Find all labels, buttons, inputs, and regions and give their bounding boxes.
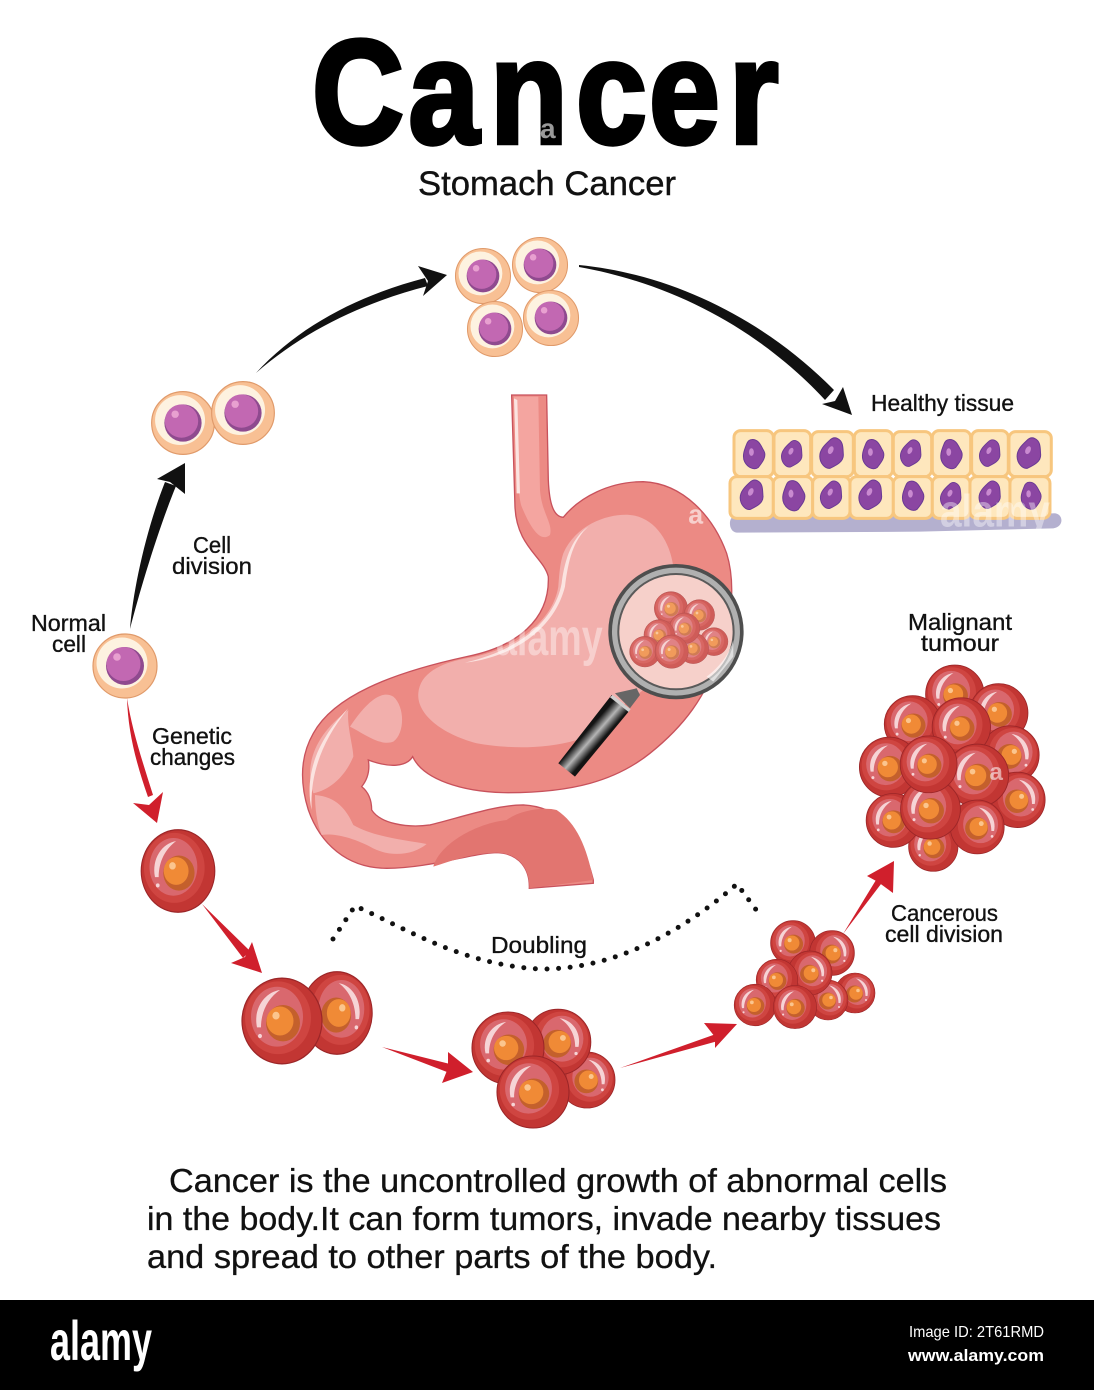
label: malignant tumour (908, 609, 1013, 656)
arrow: cluster to malignant tumour (843, 861, 894, 934)
cells: malignant tumour: a (989, 759, 1003, 786)
magnifying glass handle (558, 688, 640, 777)
cell: mutated cell (141, 830, 215, 912)
label: cell division: division (172, 553, 252, 579)
cells: four cancer cells (472, 1009, 615, 1128)
cells: four healthy cells (455, 237, 579, 357)
description text: in the body.It can form tumors, invade nearby tissues (147, 1200, 941, 1237)
label: cancerous cell division: cell division (885, 921, 1003, 947)
label: cell division (172, 532, 252, 579)
cells: small cancer cluster (734, 921, 875, 1029)
arrow: normal cell to two cells (130, 463, 185, 629)
esophagus highlight (514, 397, 551, 537)
description text: and spread to other parts of the body. (147, 1238, 717, 1275)
stomach inner lining (418, 515, 673, 747)
label: cell division: Cell (193, 532, 231, 558)
label: genetic changes: Genetic (152, 723, 232, 749)
watermark: alamy (496, 608, 603, 666)
magnifying glass lens (608, 564, 744, 699)
pylorus folds (310, 695, 427, 854)
curvature highlight (310, 398, 588, 810)
footer bar (0, 1300, 1094, 1390)
label: normal cell: Normal (31, 610, 106, 636)
description text: Cancer is the uncontrolled growth of abnormal cells (169, 1162, 947, 1199)
label: normal cell: cell (52, 631, 86, 657)
stomach (303, 395, 744, 888)
arrow: mutated to two cells (202, 904, 262, 973)
label: genetic changes: changes (150, 744, 235, 770)
title: Cancer (312, 10, 779, 175)
cells: malignant tumour (859, 665, 1045, 871)
arrow: genetic changes (127, 698, 163, 823)
arrow: four cells to cluster (620, 1023, 737, 1068)
healthy tissue (730, 431, 1061, 537)
title watermark: a (540, 113, 556, 144)
stomach watermark letter: a (688, 499, 703, 529)
footer logo: alamy (50, 1309, 152, 1372)
label: malignant tumour: tumour (921, 630, 999, 656)
label: normal cell (31, 610, 106, 657)
stomach outline (303, 395, 732, 888)
arrow: two cells to four cells (256, 266, 447, 373)
label: malignant tumour: Malignant (908, 609, 1013, 635)
dotted doubling bracket (333, 884, 760, 969)
footer image id: Image ID: 2T61RMD (909, 1324, 1044, 1341)
label: doubling: Doubling (491, 932, 587, 958)
cell: normal cell (93, 634, 157, 698)
label: cancerous cell division: Cancerous (891, 900, 998, 926)
healthy tissue: alamy (940, 486, 1050, 537)
arrow: two to four cells (382, 1047, 473, 1083)
cells: two cancer cells (242, 972, 372, 1064)
footer url: www.alamy.com (907, 1346, 1044, 1365)
subtitle: Stomach Cancer (418, 165, 676, 203)
duodenum shading (433, 809, 593, 888)
arrow: four cells to healthy tissue (579, 265, 852, 415)
description text (147, 1162, 947, 1275)
label: cancerous cell division (885, 900, 1003, 947)
cells: first division (152, 382, 274, 454)
label: healthy tissue: Healthy tissue (871, 390, 1014, 416)
label: genetic changes (150, 723, 235, 770)
